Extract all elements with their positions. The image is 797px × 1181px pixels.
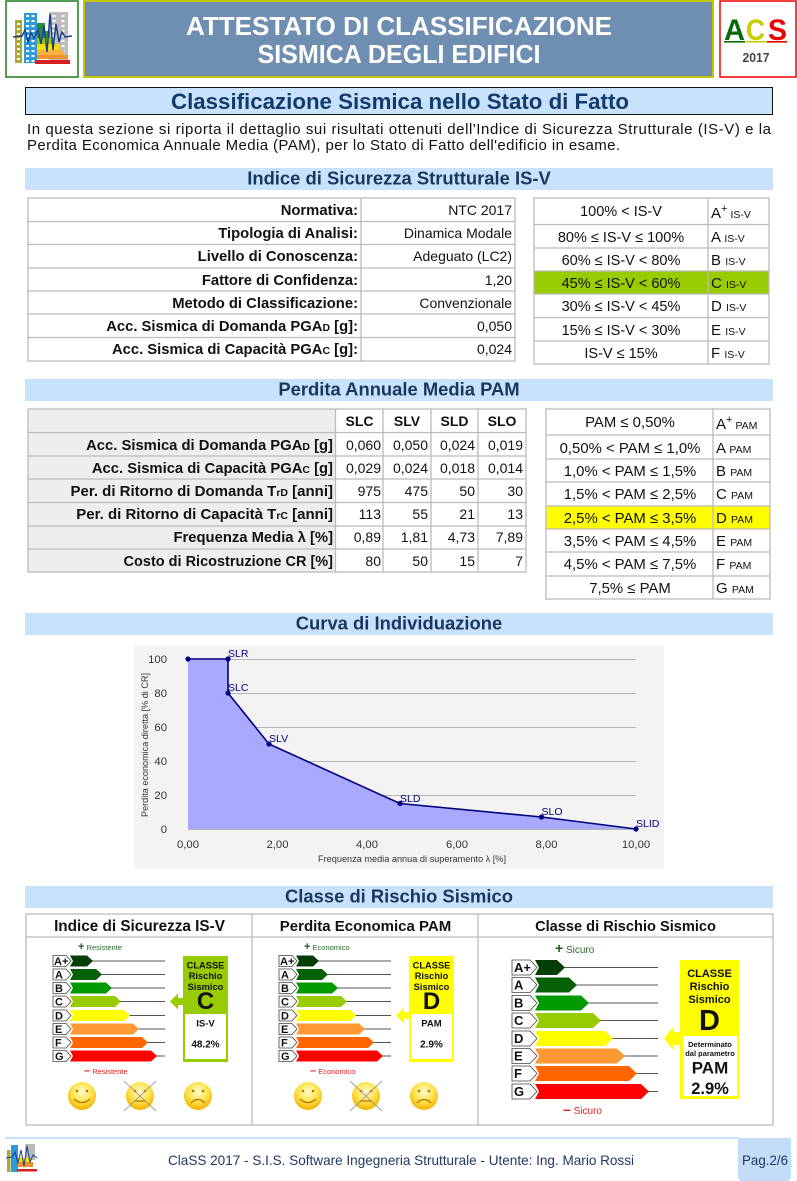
- class badge D overall: 2.9%: [691, 1080, 729, 1098]
- energy label scale overall: [512, 960, 658, 1099]
- energy label scale PAM: E: [281, 1024, 288, 1036]
- table: IS-V data: 0,024: [477, 341, 512, 357]
- table: PAM data: 13: [507, 506, 523, 522]
- minus resistente label: – Resistente: [84, 1065, 128, 1077]
- table: PAM class ranges: A PAM: [716, 440, 751, 457]
- table: IS-V class ranges: +: [721, 203, 727, 215]
- plus sicuro label: + Sicuro: [555, 940, 595, 956]
- chart: loss curve: SLO: [542, 806, 563, 818]
- chart: loss curve: 4,00: [356, 839, 378, 851]
- table: IS-V data: Adeguato (LC2): [413, 248, 512, 264]
- table: IS-V data: Livello di Conoscenza:: [198, 249, 358, 265]
- table: IS-V class ranges: 45% ≤ IS-V < 60%: [562, 276, 680, 292]
- title banner: ATTESTATO DI CLASSIFICAZIONE: [186, 11, 612, 41]
- table: PAM data: 0,014: [488, 460, 523, 476]
- table: PAM class ranges: E PAM: [716, 533, 752, 550]
- panel: PAM class: [279, 918, 454, 1111]
- table: PAM class ranges: A: [716, 416, 726, 433]
- energy label scale IS-V: D: [55, 1010, 63, 1022]
- chart: loss curve: SLD: [400, 793, 421, 805]
- table: PAM data: 15: [459, 553, 475, 569]
- table: PAM data: Costo di Ricostruzione CR [%]: [124, 554, 333, 570]
- class badge D overall: Sismico: [688, 994, 731, 1006]
- ACS 2017 logo: S: [768, 14, 787, 47]
- table: PAM data: 0,024: [393, 460, 428, 476]
- panel frame: risk class: [26, 914, 773, 1125]
- page number: [738, 1138, 791, 1181]
- energy label scale PAM: A: [281, 970, 289, 982]
- table: PAM data: 7,89: [496, 529, 523, 545]
- class badge D: Sismico: [414, 982, 450, 992]
- class badge C: Sismico: [188, 982, 224, 992]
- table: IS-V class ranges: 100% < IS-V: [580, 204, 662, 220]
- plus economico label: + Economico: [304, 941, 350, 953]
- class badge D: CLASSE: [413, 960, 450, 970]
- table: IS-V class ranges: E IS-V: [711, 322, 746, 339]
- title banner: SISMICA DEGLI EDIFICI: [258, 39, 540, 69]
- class badge C: [170, 956, 228, 1062]
- table: PAM data: SLD: [440, 413, 468, 429]
- table: PAM data: 475: [405, 483, 428, 499]
- table: IS-V class ranges: C IS-V: [711, 275, 746, 292]
- footer logo: [6, 1144, 37, 1172]
- section bar: IS-V: [25, 168, 773, 190]
- class badge D overall: PAM: [692, 1058, 728, 1078]
- class badge C: C: [197, 988, 214, 1015]
- footer rule: [5, 1137, 738, 1139]
- table: PAM class ranges: D PAM: [716, 510, 753, 527]
- table: IS-V data: 1,20: [485, 272, 512, 288]
- chart: loss curve: Perdita economica diretta [% di CR]: [140, 673, 150, 817]
- smiley sad: [184, 1082, 212, 1110]
- table: PAM class ranges: +: [726, 414, 732, 426]
- table: PAM data: 0,029: [346, 460, 381, 476]
- intro paragraph: In questa sezione si riporta il dettaglio sui risultati ottenuti dell'Indice di Sicurezza Strutturale (IS-V) e la: [27, 121, 772, 138]
- table: PAM class ranges: PAM: [735, 420, 757, 432]
- smiley neutral crossed: [350, 1081, 382, 1111]
- table: PAM class ranges: F PAM: [716, 556, 751, 573]
- table: PAM data: 0,060: [346, 437, 381, 453]
- section bar: curve: Curva di Individuazione: [296, 612, 502, 634]
- smiley happy: [294, 1082, 322, 1110]
- ACS 2017 logo: [720, 1, 796, 77]
- chart: loss curve: 20: [154, 790, 167, 802]
- energy label scale PAM: D: [281, 1010, 289, 1022]
- table: PAM data: 80: [365, 553, 381, 569]
- table: IS-V class ranges: F IS-V: [711, 345, 745, 362]
- table: IS-V class ranges: A: [711, 205, 721, 222]
- panel: PAM class: Perdita Economica PAM: [280, 918, 451, 935]
- chart: loss curve: Frequenza media annua di superamento λ [%]: [318, 854, 506, 864]
- table: PAM data: Acc. Sismica di Domanda PGAD [g]: [86, 438, 333, 454]
- chart: loss curve: SLV: [269, 733, 288, 745]
- table: IS-V class ranges: B IS-V: [711, 252, 746, 269]
- class badge D: PAM: [421, 1018, 442, 1030]
- page heading: Classificazione Sismica nello Stato di Fatto: [171, 89, 629, 114]
- section bar: risk class: [25, 886, 773, 908]
- table: IS-V class ranges: 15% ≤ IS-V < 30%: [562, 323, 680, 339]
- smiley neutral crossed: [124, 1081, 156, 1111]
- footer text: ClaSS 2017 - S.I.S. Software Ingegneria Strutturale - Utente: Ing. Mario Rossi: [168, 1152, 634, 1168]
- energy label scale IS-V: [53, 956, 165, 1063]
- class badge C: Rischio: [189, 971, 223, 981]
- chart: loss curve: 100: [148, 654, 167, 666]
- smiley happy: [68, 1082, 96, 1110]
- energy label scale PAM: B: [281, 983, 289, 995]
- table: PAM data: 21: [459, 506, 475, 522]
- page heading: [26, 88, 772, 114]
- table: PAM data: 7: [515, 553, 523, 569]
- panel: overall risk class: [512, 919, 739, 1117]
- class badge D overall: D: [699, 1005, 720, 1037]
- table: PAM class ranges: B PAM: [716, 463, 752, 480]
- table: IS-V class ranges: 30% ≤ IS-V < 45%: [562, 299, 680, 315]
- class badge D overall: [664, 960, 739, 1099]
- section bar: PAM: Perdita Annuale Media PAM: [278, 378, 520, 400]
- table: PAM data: 50: [459, 483, 475, 499]
- class badge C: IS-V: [196, 1018, 215, 1030]
- table: PAM data: 0,019: [488, 437, 523, 453]
- table: PAM class ranges: [546, 409, 770, 599]
- table: IS-V class ranges: A IS-V: [711, 229, 745, 246]
- energy label scale IS-V: C: [55, 996, 63, 1008]
- class badge D: D: [423, 988, 440, 1015]
- energy label scale overall: D: [514, 1031, 523, 1046]
- energy label scale PAM: G: [281, 1051, 290, 1063]
- table: PAM class ranges: 2,5% < PAM ≤ 3,5%: [564, 511, 696, 527]
- plus resistente label: + Resistente: [78, 941, 122, 953]
- table: PAM class ranges: 3,5% < PAM ≤ 4,5%: [564, 534, 696, 550]
- table: PAM data: SLV: [394, 413, 421, 429]
- energy label scale overall: C: [514, 1013, 524, 1028]
- table: PAM class ranges: 0,50% < PAM ≤ 1,0%: [560, 441, 700, 457]
- header logo box: [6, 1, 78, 77]
- section bar: PAM: [25, 378, 773, 401]
- energy label scale PAM: C: [281, 996, 289, 1008]
- energy label scale IS-V: G: [55, 1051, 64, 1063]
- table: PAM data: Acc. Sismica di Capacità PGAC [g]: [92, 461, 333, 477]
- chart: loss curve: SLR: [228, 648, 249, 660]
- table: PAM data: Per. di Ritorno di Capacità TrC [anni]: [76, 506, 333, 523]
- table: IS-V data: 0,050: [477, 318, 512, 334]
- table: PAM class ranges: 1,0% < PAM ≤ 1,5%: [564, 464, 696, 480]
- class badge C: 48.2%: [191, 1040, 220, 1050]
- section bar: IS-V: Indice di Sicurezza Strutturale IS-V: [247, 168, 551, 188]
- table: PAM class ranges: 4,5% < PAM ≤ 7,5%: [564, 557, 696, 573]
- table: PAM data: 0,050: [393, 437, 428, 453]
- chart: loss curve: 40: [154, 756, 167, 768]
- table: PAM data: 0,89: [354, 529, 381, 545]
- chart: loss curve: 60: [154, 722, 167, 734]
- panel: IS-V class: [53, 918, 228, 1111]
- table: IS-V data: Dinamica Modale: [404, 225, 512, 241]
- energy label scale IS-V: B: [55, 983, 63, 995]
- table: IS-V data: Acc. Sismica di Capacità PGAC [g]:: [112, 342, 358, 358]
- table: IS-V data: Convenzionale: [419, 295, 512, 311]
- chart: loss curve: 8,00: [536, 839, 558, 851]
- chart: loss curve: 10,00: [622, 839, 650, 851]
- ACS 2017 logo: C: [746, 14, 765, 47]
- class badge D: [396, 956, 454, 1062]
- page number: Pag.2/6: [742, 1153, 788, 1168]
- table: PAM data: [28, 409, 526, 572]
- table: PAM class ranges: C PAM: [716, 486, 753, 503]
- energy label scale PAM: A+: [280, 956, 294, 968]
- table: IS-V class ranges: D IS-V: [711, 298, 746, 315]
- intro paragraph: [27, 121, 772, 154]
- table: IS-V data: NTC 2017: [448, 202, 512, 218]
- ACS 2017 logo: 2017: [742, 51, 770, 65]
- energy label scale IS-V: E: [55, 1024, 62, 1036]
- table: PAM data: 113: [359, 506, 381, 522]
- table: PAM data: 0,024: [440, 437, 475, 453]
- energy label scale IS-V: A+: [54, 956, 68, 968]
- class badge D overall: dal parametro: [685, 1049, 735, 1058]
- section bar: curve: [25, 612, 773, 635]
- minus sicuro label: – Sicuro: [563, 1101, 602, 1117]
- table: IS-V data: [28, 198, 515, 361]
- table: PAM data: 4,73: [448, 529, 475, 545]
- class badge C: CLASSE: [187, 960, 224, 970]
- energy label scale overall: A: [514, 978, 524, 992]
- chart: loss curve: [134, 646, 664, 869]
- class badge D overall: CLASSE: [687, 968, 732, 980]
- table: IS-V class ranges: IS-V ≤ 15%: [584, 346, 658, 362]
- table: PAM data: 0,018: [440, 460, 475, 476]
- panel: IS-V class: Indice di Sicurezza IS-V: [54, 918, 226, 935]
- table: IS-V data: Metodo di Classificazione:: [172, 296, 358, 312]
- table: IS-V data: Tipologia di Analisi:: [218, 226, 358, 242]
- table: PAM data: 1,81: [401, 529, 428, 545]
- panel: overall risk class: Classe di Rischio Sismico: [535, 919, 716, 935]
- energy label scale IS-V: F: [55, 1038, 62, 1050]
- chart: loss curve: SLID: [636, 818, 660, 830]
- class badge D: Rischio: [415, 971, 449, 981]
- class badge D overall: Rischio: [690, 981, 730, 993]
- energy label scale PAM: F: [281, 1038, 288, 1050]
- class badge D overall: Determinato: [688, 1040, 732, 1049]
- energy label scale overall: A+: [514, 960, 531, 975]
- title banner: [84, 1, 713, 77]
- intro paragraph: Perdita Economica Annuale Media (PAM), per lo Stato di Fatto dell'edificio in esame.: [27, 137, 620, 154]
- table: PAM class ranges: 7,5% ≤ PAM: [589, 581, 671, 597]
- section bar: risk class: Classe di Rischio Sismico: [285, 886, 513, 906]
- chart: loss curve: 0: [161, 824, 167, 836]
- table: IS-V data: Fattore di Confidenza:: [202, 273, 358, 289]
- table: IS-V data: Acc. Sismica di Domanda PGAD [g]:: [106, 319, 358, 335]
- chart: loss curve: SLC: [228, 682, 249, 694]
- table: PAM data: SLC: [346, 413, 374, 429]
- table: PAM data: 975: [358, 483, 381, 499]
- energy label scale IS-V: A: [55, 970, 63, 982]
- energy label scale PAM: [279, 956, 391, 1063]
- table: PAM data: Per. di Ritorno di Domanda TrD [anni]: [70, 483, 333, 500]
- energy label scale overall: E: [514, 1048, 523, 1064]
- chart: loss curve: 2,00: [266, 839, 288, 851]
- table: IS-V data: Normativa:: [281, 203, 358, 219]
- energy label scale overall: G: [514, 1084, 524, 1099]
- table: PAM class ranges: G PAM: [716, 580, 754, 597]
- table: IS-V class ranges: [534, 198, 769, 364]
- energy label scale overall: B: [514, 996, 523, 1010]
- table: PAM data: 50: [412, 553, 428, 569]
- table: IS-V class ranges: 80% ≤ IS-V ≤ 100%: [558, 230, 684, 246]
- table: IS-V class ranges: IS-V: [730, 209, 751, 221]
- table: PAM class ranges: PAM ≤ 0,50%: [585, 415, 675, 431]
- class badge D: 2.9%: [420, 1040, 443, 1050]
- table: PAM data: 55: [412, 506, 428, 522]
- table: PAM data: 30: [507, 483, 523, 499]
- minus economico label: – Economico: [310, 1065, 355, 1077]
- table: PAM class ranges: 1,5% < PAM ≤ 2,5%: [564, 487, 696, 503]
- table: PAM data: SLO: [488, 413, 516, 429]
- chart: loss curve: 80: [154, 688, 167, 700]
- table: PAM data: Frequenza Media λ [%]: [173, 530, 333, 546]
- chart: loss curve: 0,00: [177, 839, 199, 851]
- chart: loss curve: 6,00: [446, 839, 468, 851]
- energy label scale overall: F: [514, 1066, 522, 1081]
- table: IS-V class ranges: 60% ≤ IS-V < 80%: [562, 253, 680, 269]
- ACS 2017 logo: A: [724, 14, 745, 47]
- smiley sad: [410, 1082, 438, 1110]
